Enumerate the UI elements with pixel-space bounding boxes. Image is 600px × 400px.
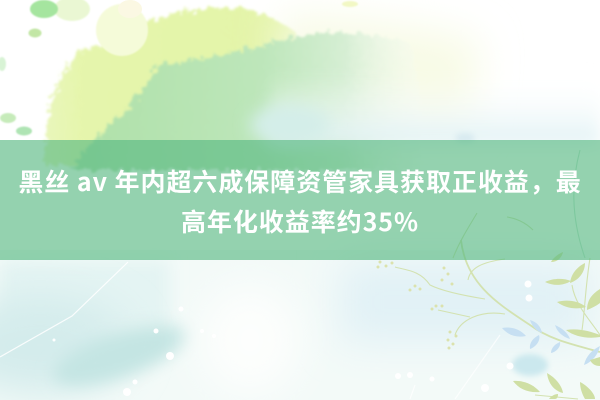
lower soft blue haze	[0, 250, 600, 400]
pale blue glow above the band	[270, 75, 600, 145]
green leaves	[513, 252, 600, 399]
title: 高年化收益率约35%	[181, 203, 419, 239]
title band	[0, 140, 600, 260]
bubbles	[0, 0, 358, 136]
plant stems	[395, 150, 600, 399]
blue leaves	[502, 320, 600, 365]
title: 黑丝 av 年内超六成保障资管家具获取正收益，最	[18, 163, 582, 199]
flower sprays	[376, 260, 458, 350]
fading wash to the right	[280, 15, 480, 130]
green wash	[70, 32, 420, 170]
title	[18, 163, 582, 239]
white light streaks and dots	[0, 262, 532, 399]
yellow-green wash	[44, 8, 296, 165]
